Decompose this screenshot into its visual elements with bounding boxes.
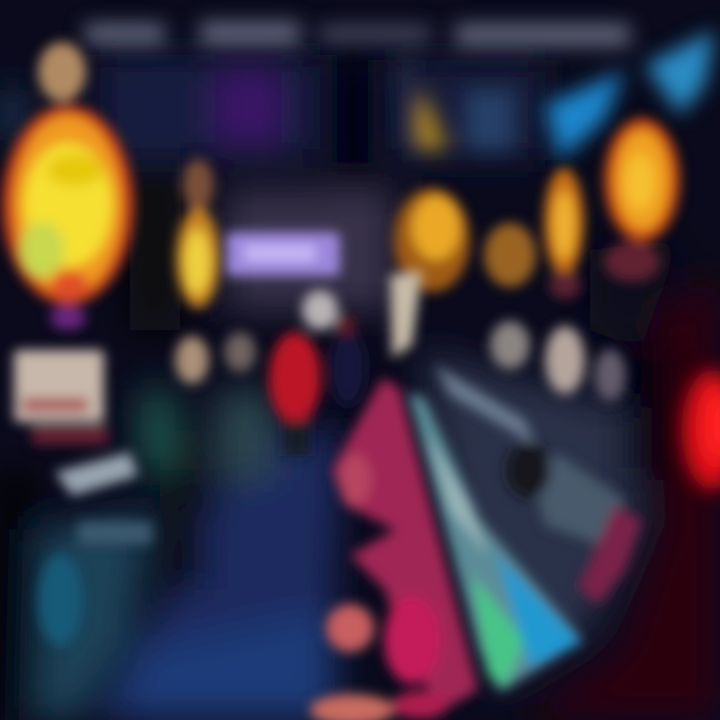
blue ceiling banners [85,22,715,160]
people in the aisle [175,290,366,456]
right side machines and red glow [420,240,720,720]
red light at right edge [682,370,720,490]
teal and blue strip [408,392,582,692]
floor and lower left [0,390,340,720]
large lantern left [2,42,134,330]
lanterns right [394,118,680,299]
right machines row [435,321,642,605]
small lantern left [176,159,220,308]
crimson carpet strip [310,378,478,720]
background: ceiling and walls [0,55,545,330]
left slot machines [14,350,152,646]
purple sign [226,232,340,276]
white pillar [390,270,422,358]
